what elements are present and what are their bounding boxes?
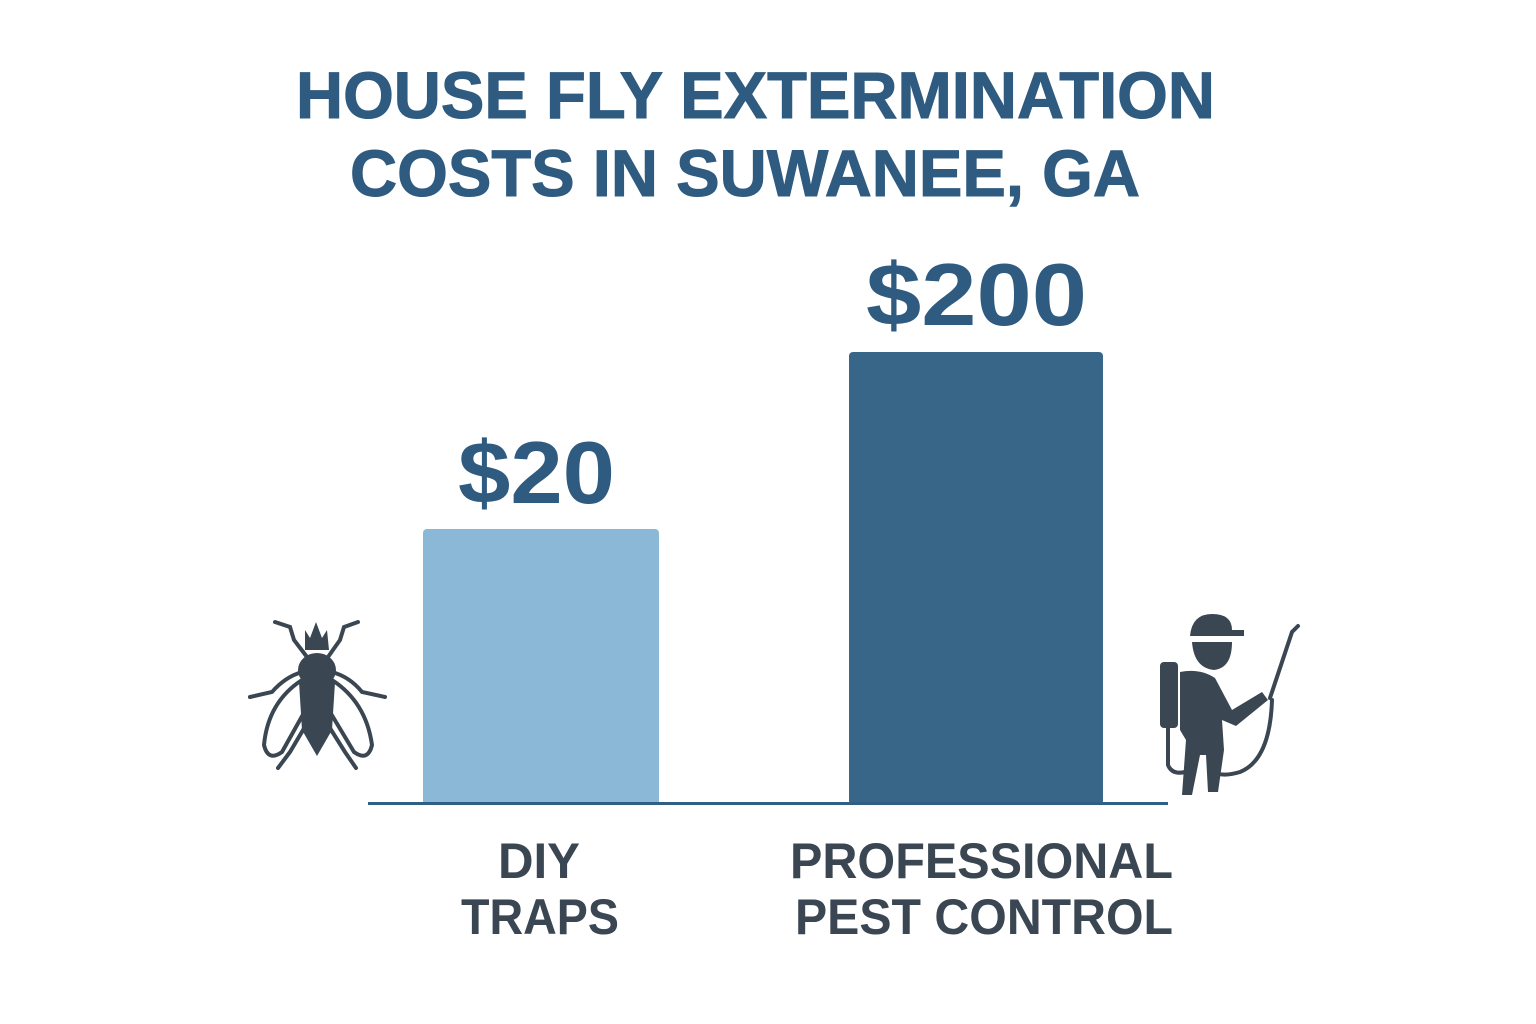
title: HOUSE FLY EXTERMINATION: [296, 58, 1215, 132]
bar: DIY traps: [423, 529, 659, 805]
category label: professional pest control: PEST CONTROL: [795, 889, 1173, 945]
value label: $200: $200: [866, 245, 1087, 344]
title: COSTS IN SUWANEE, GA: [350, 136, 1140, 210]
category label: DIY traps: [461, 833, 619, 945]
icon: pest control technician: [1160, 614, 1298, 795]
bar: professional pest control: [849, 352, 1103, 805]
category label: DIY traps: TRAPS: [461, 889, 619, 945]
category label: DIY traps: DIY: [498, 833, 580, 889]
icon: fly: [250, 622, 385, 768]
category label: professional pest control: PROFESSIONAL: [790, 833, 1173, 889]
category label: professional pest control: [790, 833, 1173, 945]
title: [296, 58, 1215, 210]
bar chart: [368, 245, 1173, 945]
baseline: [368, 802, 1168, 805]
value label: $20: $20: [458, 423, 615, 522]
